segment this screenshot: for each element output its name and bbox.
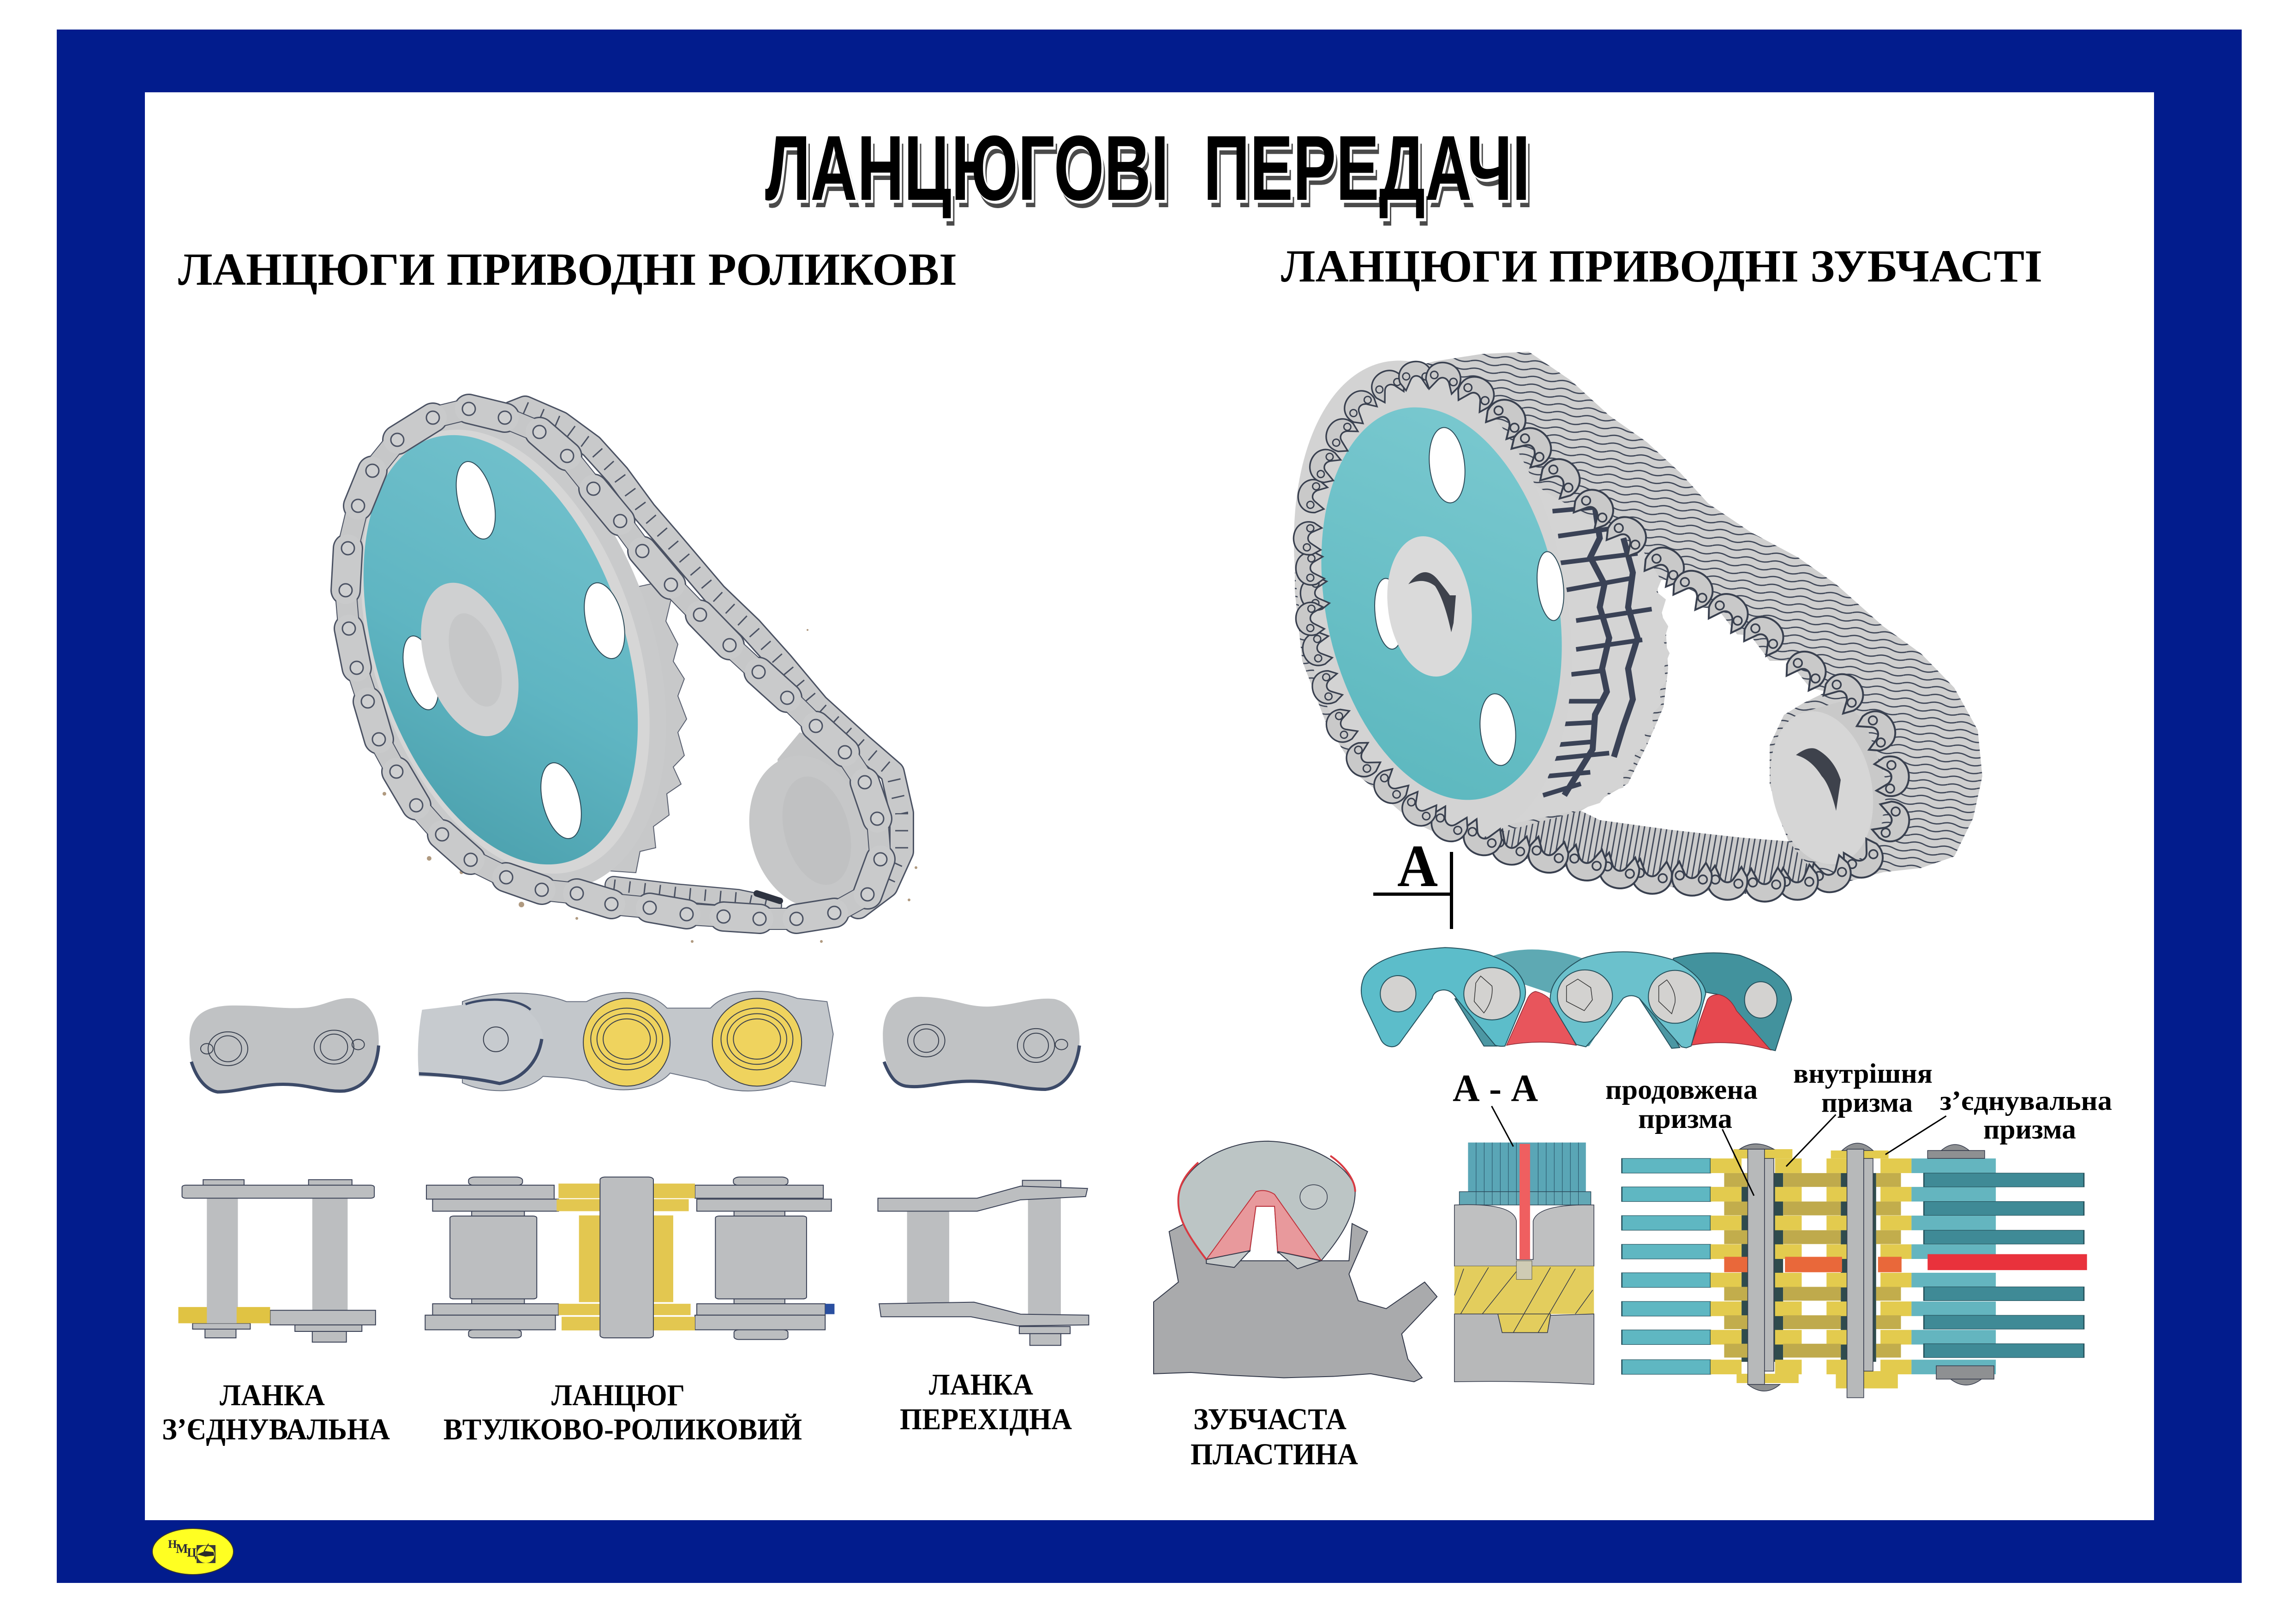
diagram: toothed plate on sprocket	[1154, 1141, 1437, 1382]
illustration: roller chain drive	[287, 373, 917, 943]
specks around the drive	[383, 629, 917, 943]
illustration: toothed chain drive	[1254, 336, 1982, 902]
label: connecting link: ЛАНКА	[220, 1378, 325, 1412]
large wheel rim	[1254, 336, 1611, 863]
diagram: prism chain plan view	[1622, 1115, 2087, 1398]
label: extended prism	[1605, 1074, 1758, 1134]
label: inner prism: внутрішня	[1793, 1058, 1933, 1089]
diagram: connecting link front view	[190, 998, 379, 1092]
red plates	[1507, 991, 1771, 1050]
title: ПЕРЕДАЧІ	[1207, 124, 1534, 227]
belt lower run	[1467, 811, 1826, 895]
diagram: transition link front view	[883, 997, 1080, 1089]
front plates	[1361, 947, 1706, 1048]
label: bush-roller chain: ЛАНЦЮГ	[551, 1378, 685, 1412]
chain plates around the belt	[1292, 359, 1915, 902]
sprocket hub	[403, 570, 536, 749]
belt opening	[1581, 580, 1826, 841]
section mark A	[1373, 833, 1453, 929]
diagram: chain plates cross view	[1361, 947, 1791, 1051]
label: bush-roller chain: ВТУЛКОВО-РОЛИКОВИЙ	[443, 1413, 802, 1446]
logo	[152, 1528, 233, 1575]
back chain strand	[512, 408, 902, 907]
label: connecting link: З’ЄДНУВАЛЬНА	[162, 1413, 390, 1446]
small wheel	[1757, 701, 1887, 874]
label: connecting prism: призма	[1983, 1114, 2076, 1145]
label: toothed plate: ПЛАСТИНА	[1191, 1438, 1358, 1471]
diagram: section A-A	[1454, 1106, 1594, 1384]
large wheel hub with key	[1379, 531, 1480, 682]
large wheel toothed drum	[1458, 484, 1670, 830]
back plates	[1455, 949, 1791, 1051]
diagram: roller chain front view	[418, 991, 833, 1091]
sprocket teal face	[313, 400, 688, 900]
sprocket small with teeth	[733, 732, 884, 922]
label: inner prism	[1793, 1058, 1933, 1118]
label: connecting prism	[1940, 1085, 2112, 1145]
large wheel holes	[1371, 425, 1567, 767]
large wheel teal face	[1288, 386, 1595, 821]
heading: roller chains: ЛАНЦЮГИ ПРИВОДНІ РОЛИКОВІ	[178, 244, 957, 295]
label: extended prism: призма	[1638, 1103, 1732, 1134]
label: toothed plate: ЗУБЧАСТА	[1193, 1402, 1346, 1436]
heading: toothed chains: ЛАНЦЮГИ ПРИВОДНІ ЗУБЧАСТІ	[1281, 240, 2042, 292]
label: inner prism: призма	[1821, 1087, 1913, 1118]
label: transition link	[900, 1368, 1072, 1436]
logo: Н	[168, 1538, 177, 1551]
label: toothed plate	[1191, 1402, 1358, 1471]
sprocket holes	[396, 457, 632, 843]
title: ЛАНЦЮГОВІ	[769, 124, 1173, 227]
label: bush-roller chain	[443, 1378, 802, 1446]
title: ПЕРЕДАЧІ	[1203, 117, 1530, 220]
large sprocket body and teeth	[287, 373, 724, 933]
logo: М	[176, 1542, 188, 1556]
label: transition link: ЛАНКА	[929, 1368, 1033, 1402]
label: transition link: ПЕРЕХІДНА	[900, 1402, 1072, 1436]
diagram: transition link top view	[878, 1181, 1089, 1345]
diagram: connecting link top view	[178, 1180, 376, 1342]
diagram: roller chain top view	[425, 1177, 834, 1340]
title: ПЕРЕДАЧІ	[1205, 119, 1532, 222]
title: ЛАНЦЮГОВІ	[767, 119, 1171, 222]
section mark A: А	[1397, 833, 1438, 899]
label: section A-A: А - А	[1453, 1067, 1538, 1110]
plate openings	[1380, 968, 1777, 1023]
title: ЛАНЦЮГОВІ	[765, 117, 1169, 220]
logo: Ц	[187, 1546, 197, 1559]
title	[765, 117, 1534, 227]
front chain strand	[339, 402, 887, 925]
label: connecting prism: з’єднувальна	[1940, 1085, 2112, 1116]
label: extended prism: продовжена	[1605, 1074, 1758, 1105]
belt	[1295, 352, 1982, 895]
label: connecting link	[162, 1378, 390, 1446]
